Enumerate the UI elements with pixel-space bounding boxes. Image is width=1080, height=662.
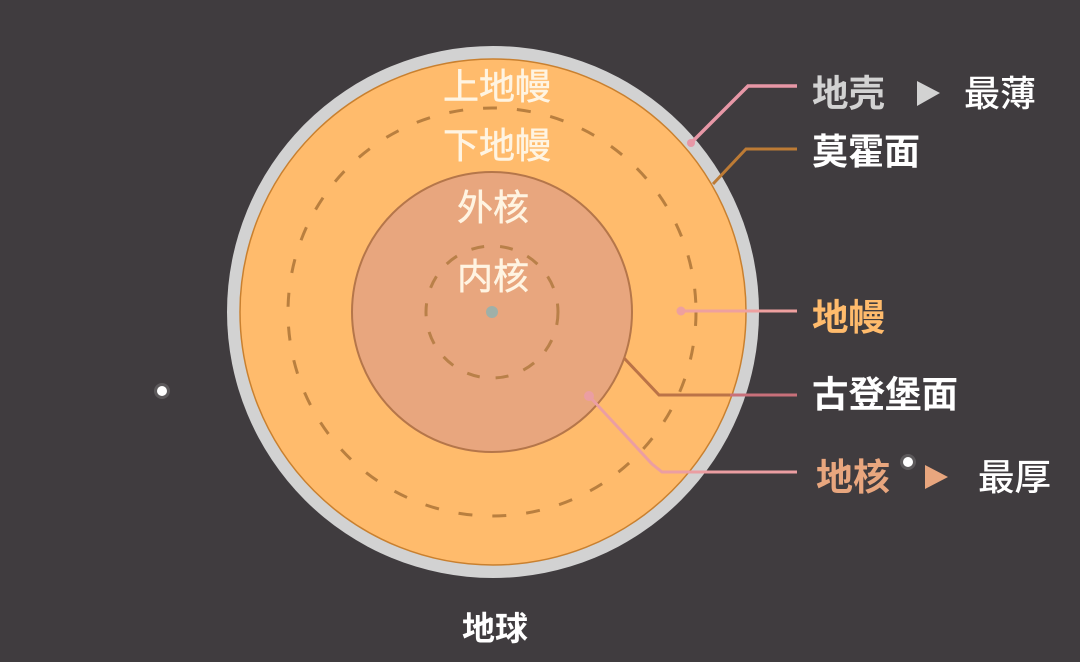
layer label: upper mantle: 上地幔 [443,66,551,107]
mantle layer [240,59,746,565]
inner core dashed boundary [426,246,558,378]
label: thinnest: 最薄 [964,73,1036,114]
label: mantle: 地幔 [812,297,885,338]
label: thickest: 最厚 [978,457,1051,498]
leader line: mantle [676,306,797,316]
mantle dashed boundary [288,108,696,516]
star dot left [154,383,170,399]
leader line: crust [687,86,797,147]
title: earth: 地球 [462,610,528,647]
center dot [486,306,498,318]
arrow: core [925,465,948,489]
crust layer [227,46,759,578]
star dot right [900,454,916,470]
leader line: core [584,391,797,472]
earth cross-section [227,46,759,578]
outer core [352,172,632,452]
arrow: crust [917,81,940,106]
layer label: inner core: 内核 [457,256,529,297]
layer label: lower mantle: 下地幔 [443,125,551,166]
label: Moho: 莫霍面 [812,131,920,172]
label: crust: 地壳 [812,73,885,114]
label: core: 地核 [816,457,890,498]
label: Gutenberg: 古登堡面 [812,374,958,415]
leader line: Gutenberg [624,358,797,395]
layer label: outer core: 外核 [457,187,529,228]
leader line: Moho [713,149,797,184]
